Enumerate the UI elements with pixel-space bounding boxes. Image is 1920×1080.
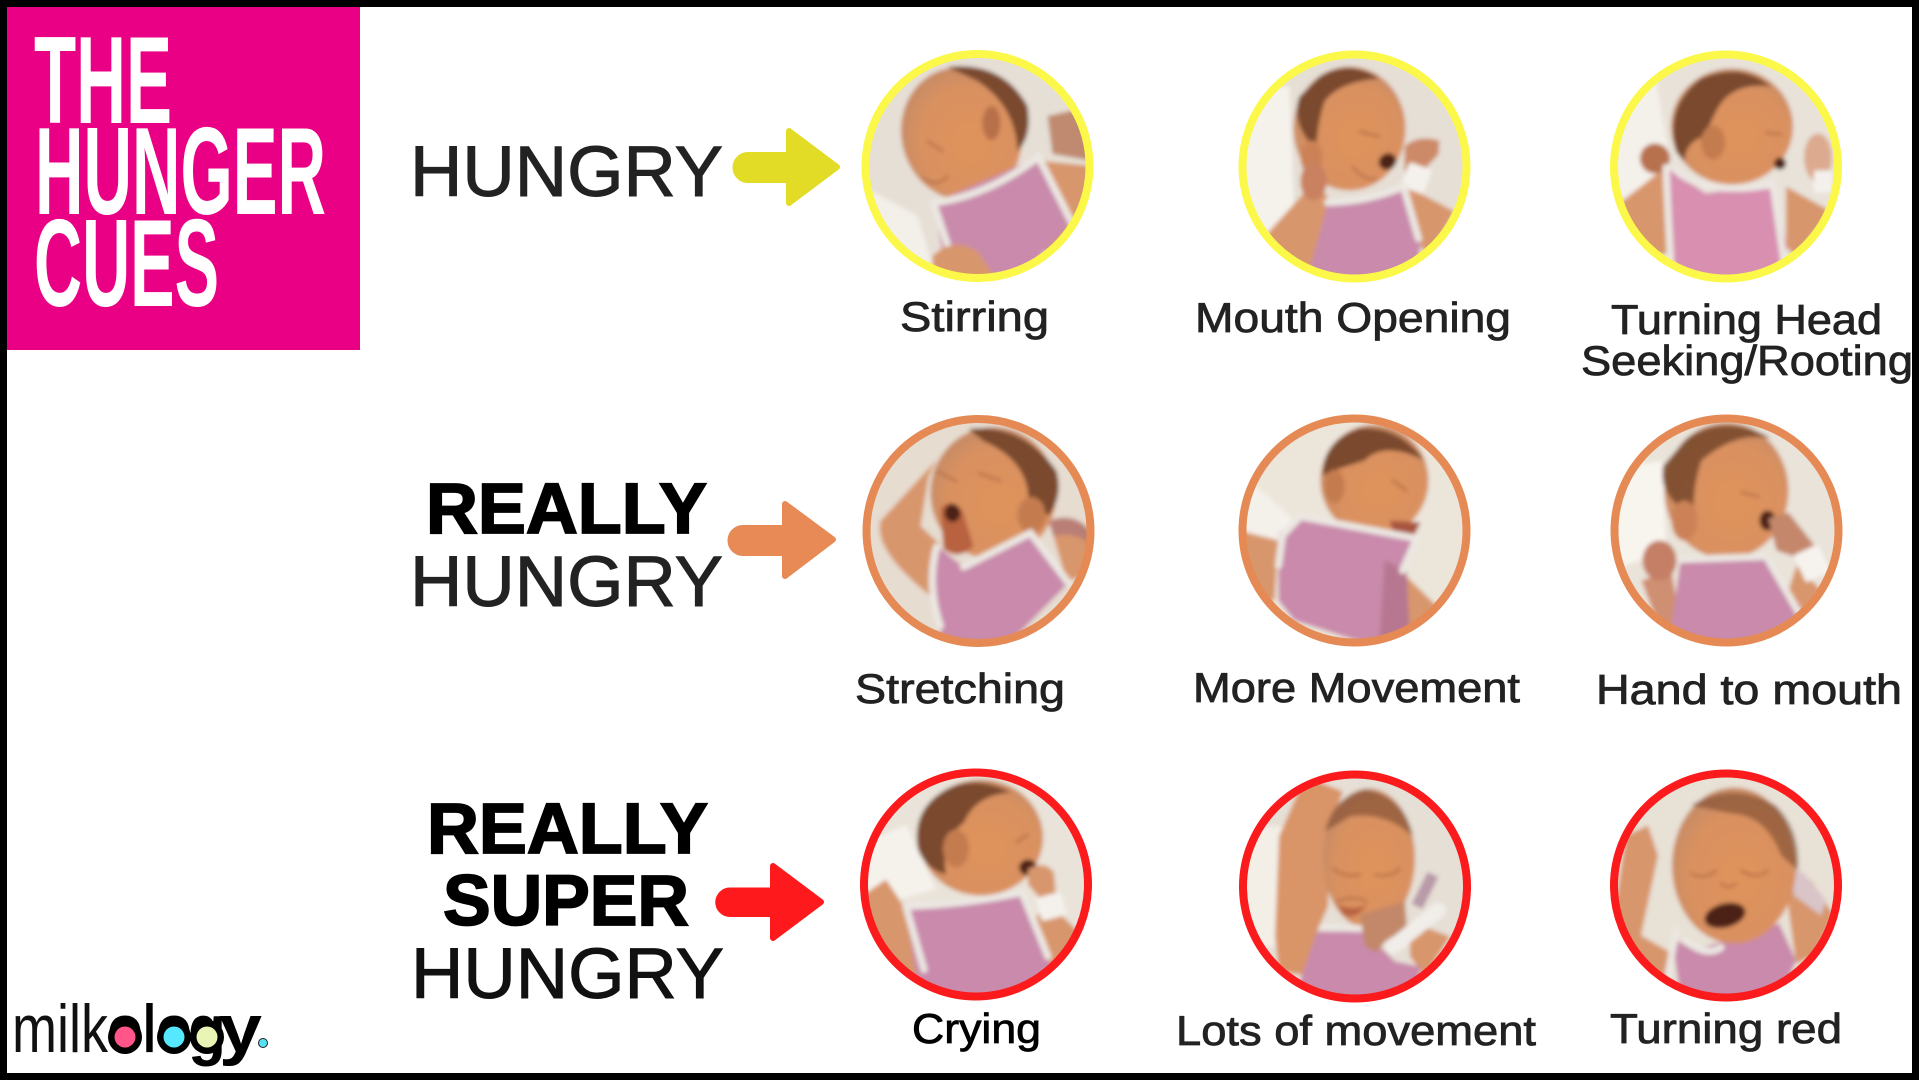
photo: lots of movement baby <box>1240 772 1470 1002</box>
arrow: yellow <box>736 131 837 203</box>
label: turning head seeking/rooting: Seeking/Rooting <box>1581 337 1913 384</box>
title: CUES <box>34 195 219 333</box>
title: HUNGER <box>35 103 326 241</box>
label: crying: Crying <box>912 1005 1041 1052</box>
logo: milkology: g <box>188 991 226 1067</box>
photo: stirring baby <box>862 51 1092 281</box>
photo: crying baby <box>861 770 1091 1000</box>
photo: mouth opening baby <box>1240 52 1470 282</box>
heading: really super hungry <box>411 790 724 1014</box>
arrow: red <box>718 866 821 938</box>
label: lots of movement: Lots of movement <box>1176 1007 1536 1054</box>
heading: really hungry: REALLY <box>426 470 707 549</box>
logo: milkology <box>12 991 268 1067</box>
label: hand to mouth: Hand to mouth <box>1596 666 1902 713</box>
label: mouth opening: Mouth Opening <box>1195 294 1511 341</box>
label: stretching: Stretching <box>855 665 1065 712</box>
photo: stretching baby <box>864 416 1094 646</box>
title panel <box>7 7 360 350</box>
logo: milkology: l <box>143 991 156 1067</box>
photo: turning red baby <box>1611 770 1841 1000</box>
heading: really super hungry: HUNGRY <box>411 935 724 1014</box>
heading: really super hungry: REALLY <box>427 790 708 869</box>
logo: milkology: o <box>107 991 143 1067</box>
logo: milkology: milk <box>12 991 109 1067</box>
arrow: orange <box>730 504 833 576</box>
label: more movement: More Movement <box>1193 664 1520 711</box>
title: THE <box>34 12 172 150</box>
logo: milkology: y <box>219 991 262 1067</box>
photo: more movement baby <box>1240 416 1470 646</box>
logo: milkology: o <box>156 991 192 1067</box>
label: stirring: Stirring <box>900 293 1049 340</box>
photo: turning head baby <box>1611 52 1841 282</box>
label: turning red: Turning red <box>1610 1005 1842 1052</box>
title <box>34 12 326 333</box>
photo: hand to mouth baby <box>1612 416 1842 646</box>
heading: hungry: HUNGRY <box>410 133 723 212</box>
heading: really hungry: HUNGRY <box>410 543 723 622</box>
heading: really hungry <box>410 470 723 622</box>
label: turning head seeking/rooting <box>1581 296 1913 384</box>
heading: really super hungry: SUPER <box>443 862 689 941</box>
label: turning head seeking/rooting: Turning Head <box>1611 296 1882 343</box>
